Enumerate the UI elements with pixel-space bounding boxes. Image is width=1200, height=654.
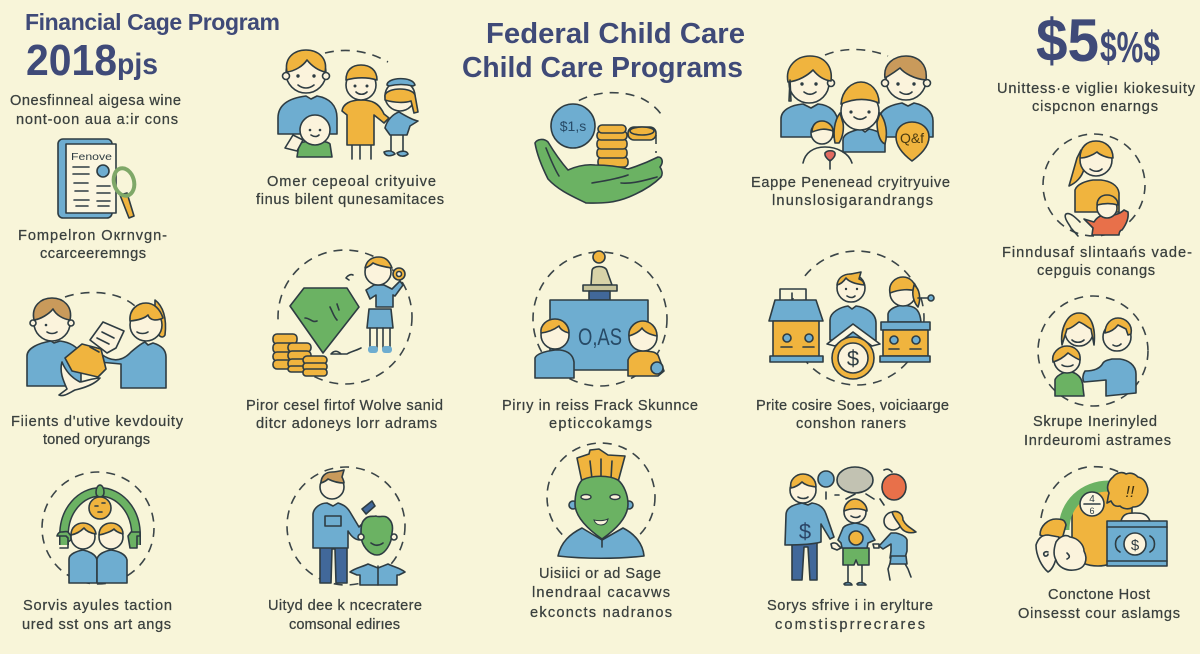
caption: finus bilent qunesamitaces — [256, 192, 444, 208]
icon: savings with money box: $ — [1131, 537, 1140, 554]
big dollar figure: $%$ — [1100, 23, 1160, 72]
caption — [18, 228, 167, 262]
icon: family with balloons: $ — [799, 519, 811, 544]
caption — [22, 598, 172, 633]
caption: cepguis conangs — [1037, 263, 1155, 279]
caption — [256, 174, 444, 208]
panel: budget and money — [1018, 467, 1180, 622]
caption: Pirıy in reiss Frack Skunnce — [502, 398, 698, 414]
panel: protected children — [22, 472, 172, 633]
icon: mother with child — [1043, 134, 1145, 236]
big dollar figure — [1036, 7, 1160, 74]
icon: savings with money box: 6 — [1089, 506, 1095, 516]
panel: houses and money — [756, 251, 949, 432]
panel: exchange of documents — [11, 293, 184, 448]
icon: two people exchanging folder — [27, 293, 166, 396]
caption: Sorvis ayules taction — [23, 598, 172, 614]
left big number: 2018 — [26, 36, 117, 85]
caption: Finndusaf slintaańs vade- — [1002, 245, 1192, 261]
caption: Eappe Penenead cryitryuive — [751, 175, 950, 191]
icon: children under arch — [42, 472, 154, 584]
panel: financial program header — [10, 9, 280, 128]
icon: houses, people and dollar coin — [769, 251, 934, 385]
left heading: Financial Cage Program — [25, 9, 280, 35]
statistic caption: cispcnon enarngs — [1032, 99, 1158, 115]
caption — [268, 598, 422, 633]
icon: teacher and green child — [287, 467, 405, 585]
statistic caption: Unittess·e viglieı kiokesuity — [997, 81, 1196, 97]
icon: board with two children: O,AS — [578, 324, 622, 351]
caption: Prite cosire Soes, voiciaarge — [756, 398, 949, 414]
panel: shield and coins — [246, 250, 443, 432]
caption: Piror cesel firtof Wolve sanid — [246, 398, 443, 414]
caption: Fompelron Oкrnvgn- — [18, 228, 167, 244]
caption: Skrupe Inerinyled — [1033, 414, 1157, 430]
caption: conshon raners — [796, 416, 906, 432]
panel: crowned head — [530, 443, 672, 621]
panel: family hug — [1024, 296, 1171, 449]
icon: document and magnifier — [58, 139, 137, 218]
panel: parent and child — [1002, 134, 1192, 279]
panel: document review — [18, 139, 167, 262]
caption: Sorys sfrive i in erylture — [767, 598, 933, 614]
icon: savings with money box — [1036, 467, 1167, 572]
left intro text: nont-oon aua a:ir cons — [16, 112, 178, 128]
icon: board with two children — [533, 251, 667, 386]
caption: epticcokamgs — [549, 416, 652, 432]
title — [462, 18, 745, 84]
icon: savings with money box: 4 — [1089, 494, 1095, 505]
caption: Omer cepeoal crityuive — [267, 174, 436, 190]
icon: hand holding coins: $1,s — [560, 118, 586, 134]
big dollar figure: $5 — [1036, 7, 1099, 74]
panel: family with shield — [751, 49, 950, 209]
caption — [767, 598, 933, 633]
statistic caption — [997, 81, 1196, 115]
icon: houses, people and dollar coin: $ — [847, 346, 859, 371]
caption: Fiients d'utive kevdouity — [11, 414, 184, 430]
icon: parents and child — [1038, 296, 1148, 406]
caption: ditcr adoneys lorr adrams — [256, 416, 437, 432]
panel: family with baby — [256, 50, 444, 208]
panel: dollar statistic — [997, 7, 1196, 115]
icon: green head with crown — [547, 443, 655, 558]
caption: Uisiici or ad Sage — [539, 566, 661, 582]
caption: ekconcts nadranos — [530, 605, 672, 621]
panel: family holding hands — [767, 467, 933, 633]
caption: Oinsesst cour aslamgs — [1018, 606, 1180, 622]
icon: savings with money box: !! — [1126, 484, 1135, 501]
caption — [751, 175, 950, 209]
caption: comstisprrecrares — [775, 617, 925, 633]
panel: adult and child — [268, 467, 422, 633]
caption: ccarceeremngs — [40, 246, 146, 262]
caption: toned oryurangs — [43, 432, 150, 448]
title: Child Care Programs — [462, 52, 743, 84]
left intro text: Onesfinneal aigesa wine — [10, 93, 181, 109]
caption — [502, 398, 698, 432]
caption — [1018, 587, 1180, 622]
icon: family of four: Q&f — [900, 130, 924, 146]
caption: lnunslosigarandrangs — [772, 193, 933, 209]
panel: classroom board — [502, 251, 698, 432]
panel: hand with coins — [535, 93, 663, 203]
icon: family of four — [781, 49, 933, 169]
caption: Conctone Host — [1048, 587, 1150, 603]
caption — [246, 398, 443, 432]
left big number: pjs — [117, 48, 158, 81]
caption: lnendraal cacavws — [532, 585, 670, 601]
icon: child, shield and coin stacks — [273, 250, 412, 384]
caption — [530, 566, 672, 621]
caption: Uityd dee k ncecratere — [268, 598, 422, 614]
icon: family with balloons — [785, 467, 916, 585]
caption — [1002, 245, 1192, 279]
left intro text — [10, 93, 181, 128]
caption — [756, 398, 949, 432]
caption: comsonal edirıes — [289, 617, 400, 633]
caption: ured sst ons art angs — [22, 617, 171, 633]
icon: document and magnifier: Fenove — [71, 152, 113, 163]
icon: family — [278, 50, 418, 159]
caption — [11, 414, 184, 448]
caption — [1024, 414, 1171, 449]
title: Federal Child Care — [486, 18, 745, 50]
caption: Inrdeuromi astrames — [1024, 433, 1171, 449]
